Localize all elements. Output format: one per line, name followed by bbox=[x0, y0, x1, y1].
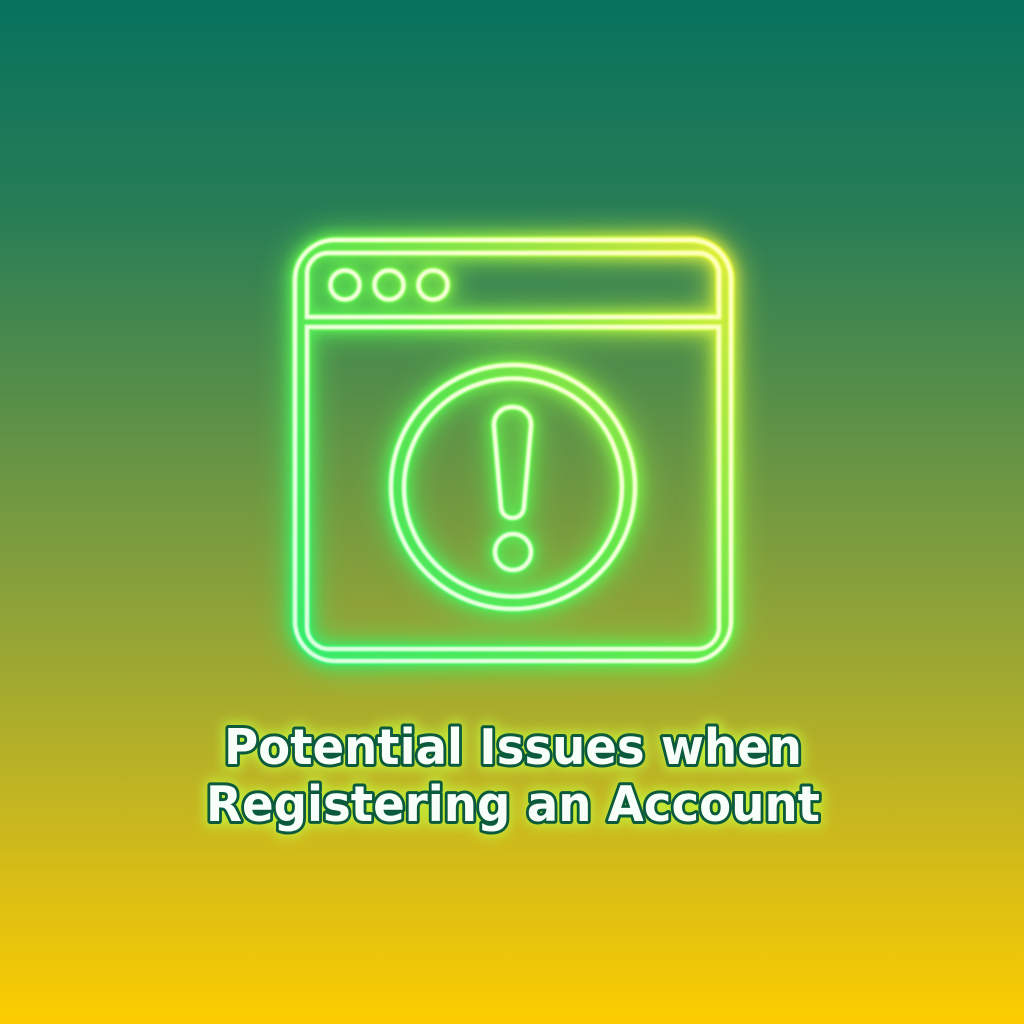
title line one: Potential Issues when bbox=[224, 719, 802, 776]
title glow: Potential Issues when bbox=[224, 719, 802, 776]
title line two: Registering an Account bbox=[206, 776, 820, 833]
title bbox=[206, 719, 820, 833]
icon: browser window with warning bbox=[295, 240, 731, 661]
title glow: Registering an Account bbox=[206, 776, 820, 833]
title glow bbox=[206, 719, 820, 833]
